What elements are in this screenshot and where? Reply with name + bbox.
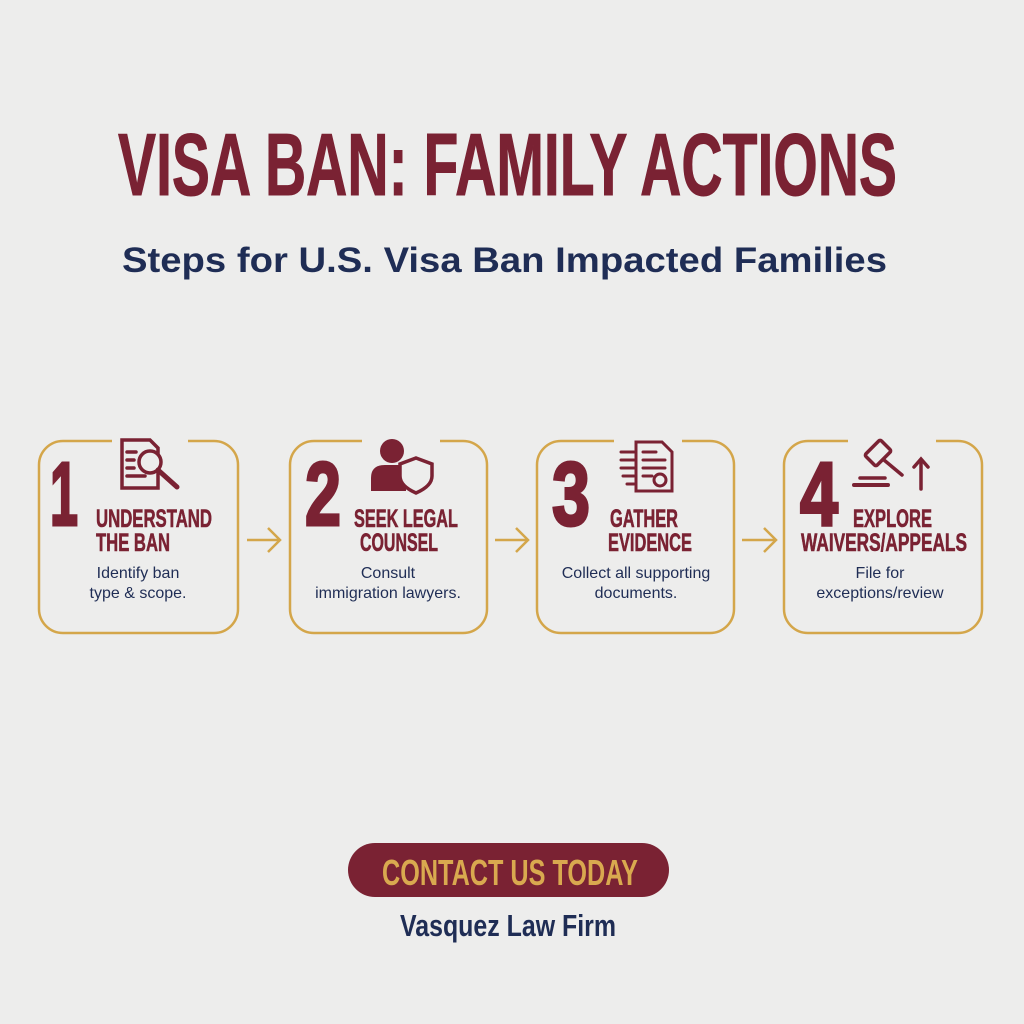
icon: gavel arrow	[854, 440, 928, 489]
number 1: 1	[50, 445, 78, 545]
description: Collect all supporting	[562, 565, 710, 582]
icon: document magnifier	[122, 440, 177, 488]
panel: step 1	[39, 436, 238, 633]
panel: step 1: type & scope.	[90, 585, 186, 602]
description: File for	[856, 565, 905, 582]
panel: step 2: COUNSEL	[360, 529, 438, 557]
button: contact us: CONTACT US TODAY	[382, 852, 638, 893]
panel: step 3: EVIDENCE	[608, 529, 692, 557]
subtitle: Steps for U.S. Visa Ban Impacted Families	[122, 241, 887, 280]
heading: SEEK LEGAL	[354, 505, 458, 533]
firm name: Vasquez Law Firm	[400, 908, 616, 943]
panel: step 4: exceptions/review	[816, 585, 944, 602]
heading: EXPLORE	[853, 505, 932, 533]
panel: step 3	[537, 436, 734, 633]
heading: UNDERSTAND	[96, 505, 212, 533]
description: Identify ban	[97, 565, 179, 582]
panel: step 4	[784, 436, 982, 633]
icon: person shield	[371, 439, 432, 493]
number 2: 2	[305, 445, 341, 545]
heading: GATHER	[610, 505, 678, 533]
icon: documents	[621, 442, 672, 491]
number 3: 3	[552, 445, 590, 545]
number 4: 4	[800, 445, 838, 545]
panel: step 2: immigration lawyers.	[315, 585, 461, 602]
panel: step 3: documents.	[595, 585, 677, 602]
panel: step 1: THE BAN	[96, 529, 170, 557]
description: Consult	[361, 565, 416, 582]
arrow 2	[495, 528, 528, 552]
arrow 3	[742, 528, 776, 552]
panel: step 2	[290, 436, 487, 633]
arrow 1	[247, 528, 280, 552]
button: contact us	[348, 843, 669, 897]
